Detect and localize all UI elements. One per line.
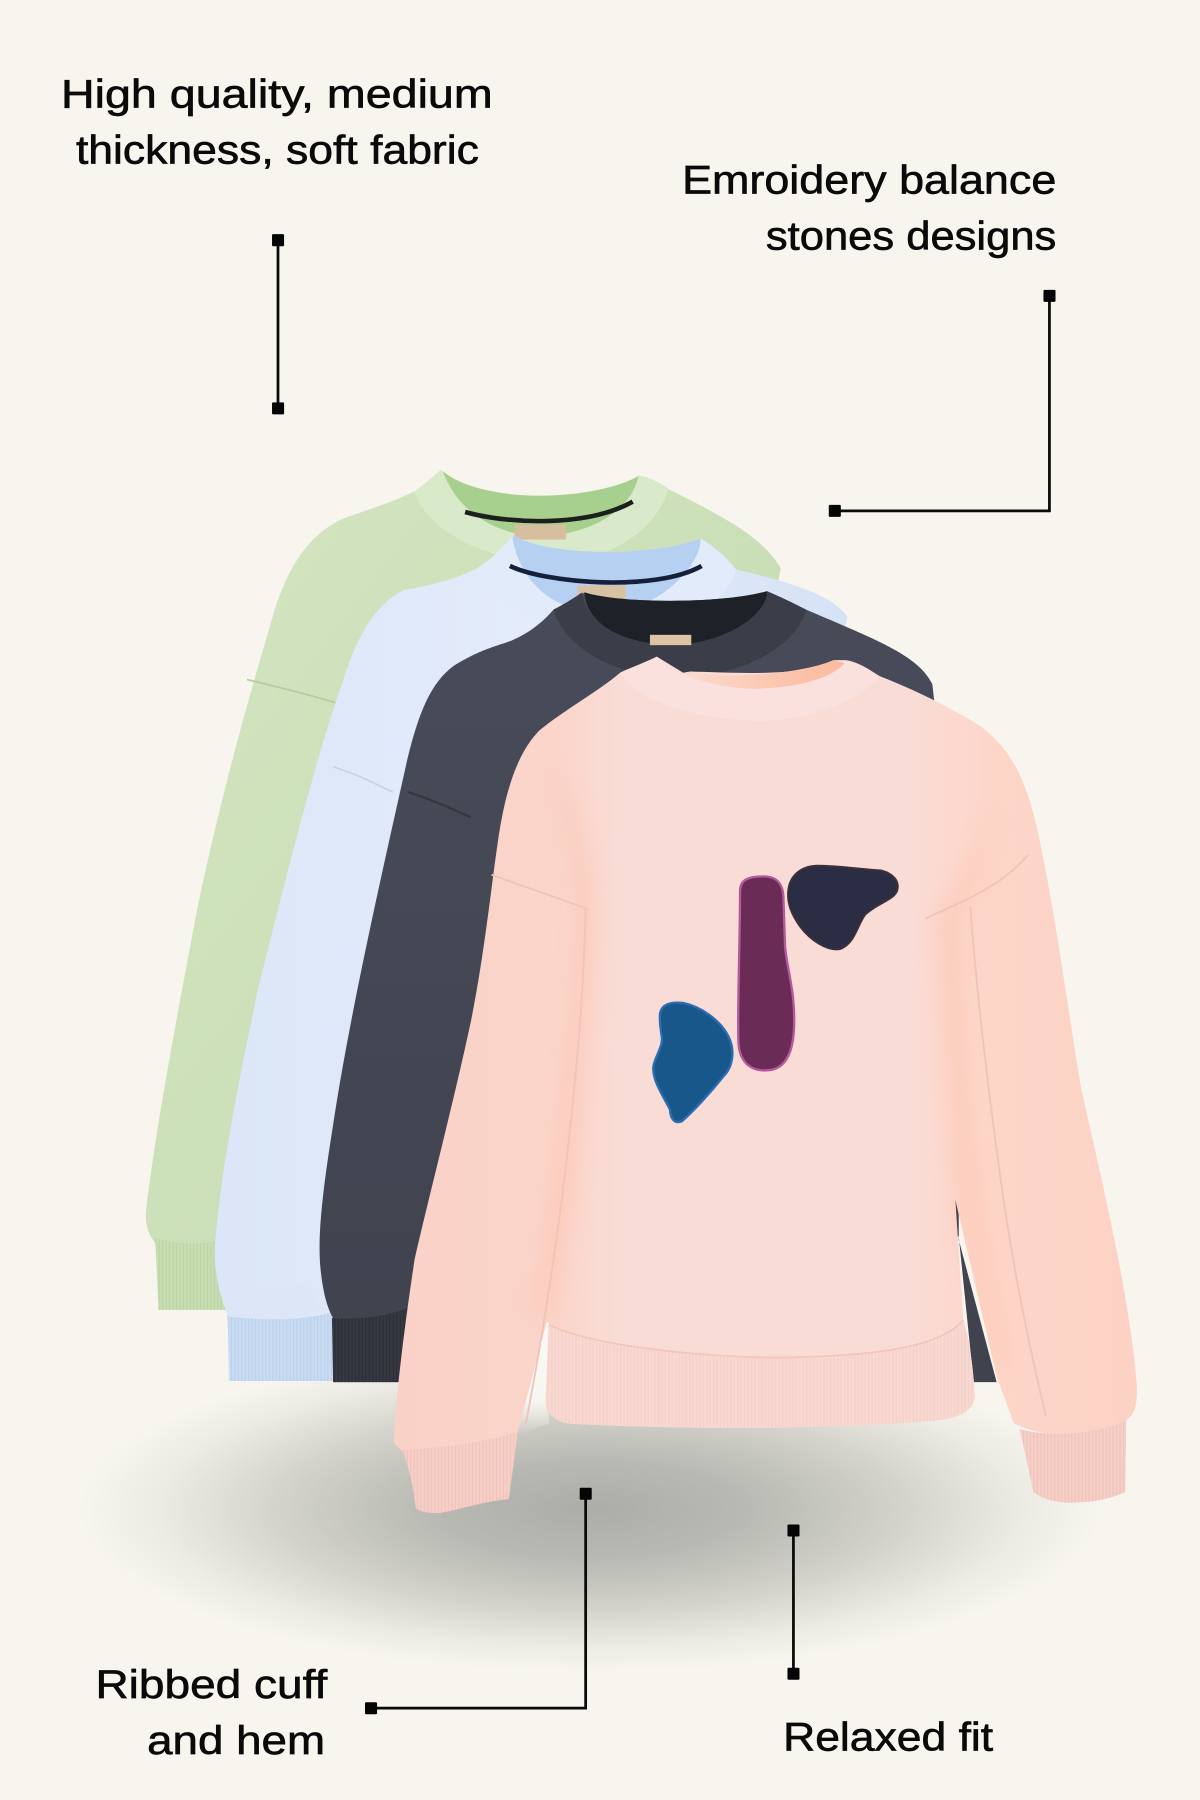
pink right cuff <box>1020 1420 1126 1503</box>
dark collar <box>554 591 806 677</box>
pink seams <box>492 855 1046 1423</box>
pink collar <box>620 657 880 721</box>
callout line: cuff and hem <box>365 1488 592 1714</box>
green cuff <box>155 1238 230 1310</box>
callout line: fabric <box>272 234 284 414</box>
embroidered stones <box>653 866 898 1122</box>
pink underarm shading <box>535 758 1010 1376</box>
callout text: embroidery <box>682 158 1056 259</box>
pink hem <box>545 1320 975 1428</box>
blue inner neck <box>506 536 702 615</box>
sweatshirt: green <box>146 470 781 1310</box>
pink garment body <box>394 657 1137 1454</box>
callout text: cuff and hem: Ribbed cuff <box>95 1663 329 1707</box>
callout text: fabric: High quality, medium <box>61 72 493 116</box>
callout text: fabric: thickness, soft fabric <box>76 129 479 173</box>
stone: navy <box>788 866 898 949</box>
pink left cuff <box>402 1432 518 1513</box>
blue neck tape <box>510 566 702 582</box>
green inner neck <box>443 472 638 536</box>
sweatshirt: blue <box>215 536 847 1381</box>
halo between sleeve and hem <box>517 1320 549 1435</box>
stone: plum <box>738 876 794 1070</box>
green neck tape <box>465 502 633 521</box>
pink inner neck <box>683 660 845 689</box>
callout line: embroidery <box>829 290 1056 517</box>
callout text: embroidery: stones designs <box>766 215 1056 259</box>
green collar <box>415 470 668 562</box>
sweatshirt: pink (front) <box>394 657 1137 1513</box>
dark cuff <box>332 1306 411 1382</box>
callout text: cuff and hem: and hem <box>147 1719 325 1763</box>
stone: blue <box>653 1003 732 1122</box>
callout text: relaxed fit: Relaxed fit <box>783 1716 993 1760</box>
callout text: embroidery: Emroidery balance <box>682 158 1056 202</box>
blue collar <box>475 536 736 638</box>
sweatshirt: dark <box>320 591 997 1382</box>
callout line: relaxed fit <box>787 1524 800 1680</box>
dark inner neck <box>585 591 767 645</box>
ground shadow <box>79 1347 1101 1673</box>
callout text: fabric <box>61 72 493 173</box>
blue cuff <box>227 1312 335 1381</box>
callout text: cuff and hem <box>95 1663 329 1763</box>
